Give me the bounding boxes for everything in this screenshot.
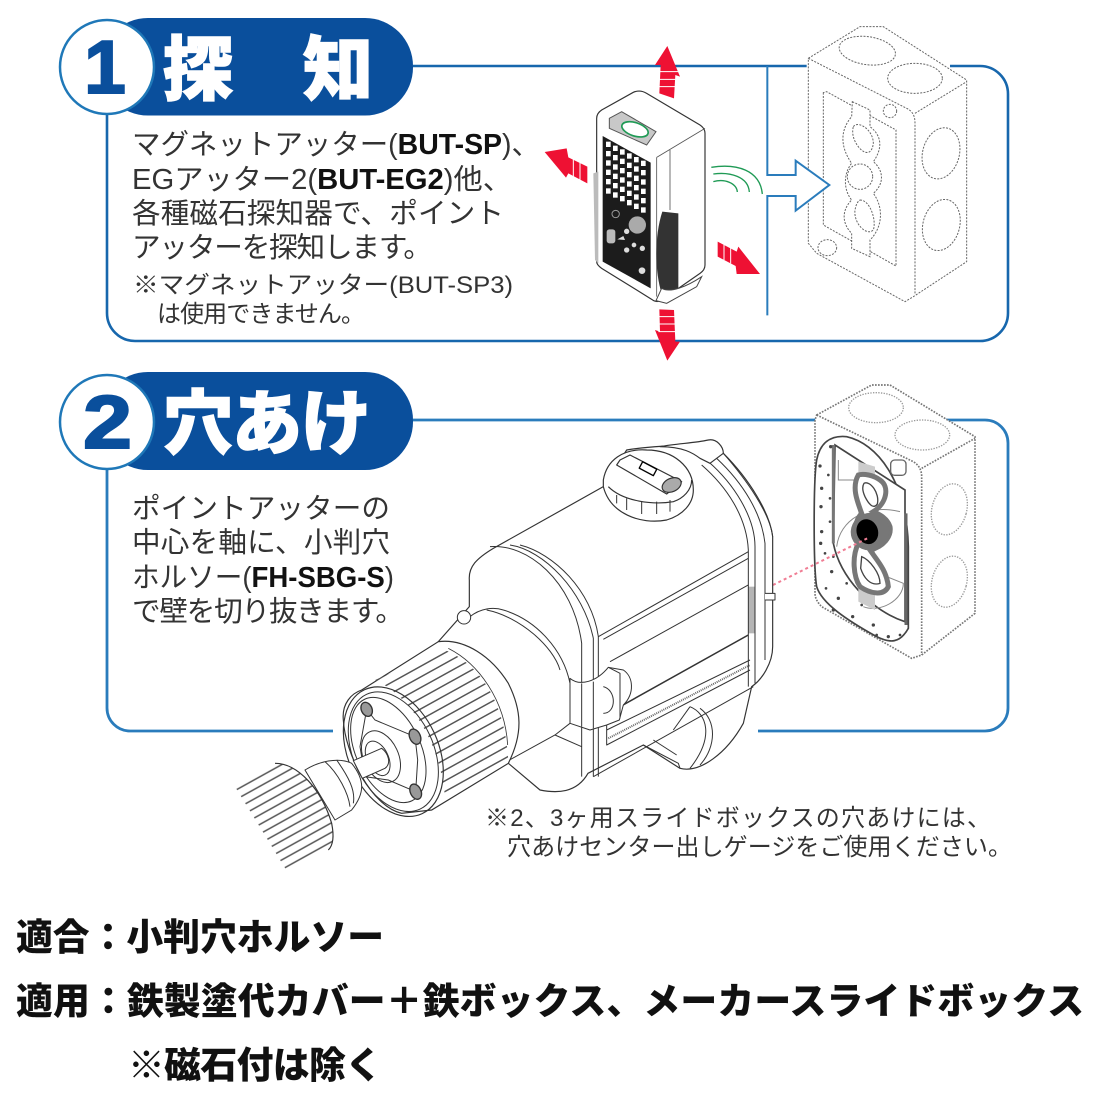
panel: step 2 frame (107, 420, 1008, 731)
chuck face (324, 671, 463, 833)
arrow: up (655, 46, 680, 98)
text block: step 2 description: ポイントアッターの (132, 493, 390, 525)
heading: step 2: 2 (83, 380, 132, 464)
text block: step 1 note: ※マグネットアッター(BUT-SP3) (133, 272, 513, 299)
text block: step 1 note (133, 272, 513, 328)
knockouts (849, 393, 973, 611)
heading: step 1: 1 (84, 25, 126, 109)
clip (570, 667, 631, 730)
text block: step 2 description (132, 493, 404, 628)
level knob (603, 440, 723, 521)
illustration: outlet box with hole (814, 385, 975, 658)
arrow: right (718, 242, 760, 274)
heading: step 2 (60, 372, 413, 470)
drill bit hub (305, 760, 362, 820)
text block: footnote: ※2、3ヶ用スライドボックスの穴あけには、 (485, 805, 991, 832)
text block: step 1 description: EGアッター2(BUT-EG2)他、 (132, 164, 512, 196)
plate with slot (845, 462, 895, 610)
dotted rim (818, 445, 901, 638)
text block: step 1 description: 各種磁石探知器で、ポイント (132, 198, 504, 230)
text block: compatibility: 適用：鉄製塗代カバー＋鉄ボックス、メーカースライドボックス (16, 981, 1084, 1022)
text block: step 2 description: 中心を軸に、小判穴 (132, 527, 390, 559)
heading: step 1 (60, 18, 413, 116)
text block: compatibility (16, 917, 1084, 1086)
laser line (773, 538, 868, 585)
signal waves (711, 166, 762, 194)
text block: step 2 description: ホルソー(FH-SBG-S) (132, 562, 394, 594)
handle grip (643, 707, 712, 768)
text block: compatibility: 適合：小判穴ホルソー (16, 917, 384, 958)
text block: step 1 note: は使用できません。 (157, 301, 365, 328)
arrow: left (545, 148, 587, 183)
drill bit knurled handle (235, 763, 333, 873)
text block: step 1 description (132, 129, 540, 264)
illustration: hole saw body (438, 440, 775, 792)
text block: compatibility: ※磁石付は除く (128, 1045, 382, 1086)
side panels (593, 552, 753, 777)
text block: step 1 description: アッターを探知します。 (132, 232, 432, 264)
text block: step 1 description: マグネットアッター(BUT-SP)、 (132, 129, 540, 161)
drill shaft (353, 748, 389, 778)
heading: step 2: 穴あけ (163, 385, 371, 463)
panel: step 1 frame (107, 66, 1008, 341)
box outline (815, 385, 975, 658)
illustration: detector with arrows (545, 27, 967, 361)
text block: footnote: 穴あけセンター出しゲージをご使用ください。 (507, 834, 1012, 861)
outlet box (dashed) (808, 27, 967, 302)
wall opening (814, 436, 908, 641)
arrow: direction (767, 66, 829, 315)
strap (702, 453, 775, 687)
detector body (593, 91, 705, 303)
body outline (438, 442, 773, 792)
heading: step 1: 探 知 (163, 31, 373, 109)
arrow: down (655, 309, 680, 361)
illustration: chuck and bit (235, 641, 519, 873)
text block: footnote (485, 805, 1012, 861)
text block: step 2 description: で壁を切り抜きます。 (132, 596, 404, 628)
chuck body (343, 641, 519, 813)
